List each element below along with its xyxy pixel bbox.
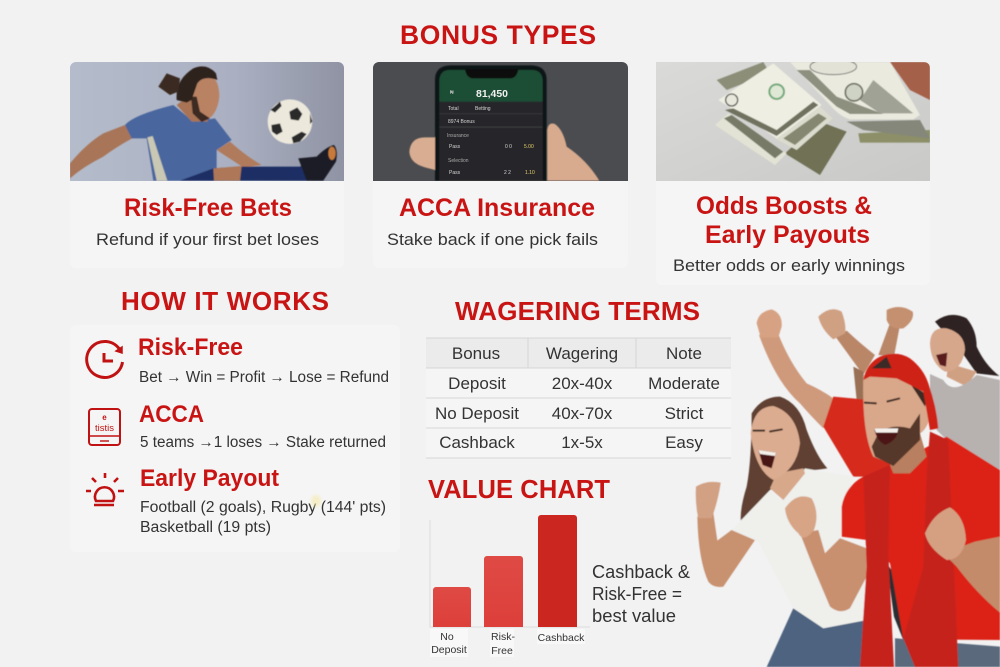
left woman hair	[741, 397, 827, 527]
icon: betting slip: tistis	[95, 423, 114, 434]
table: wagering terms: Note	[666, 344, 702, 363]
text: stake back: Stake back if one pick fails	[387, 230, 598, 249]
text: refund: Refund if your first bet loses	[96, 230, 319, 249]
axis labels: Deposit	[431, 644, 467, 656]
photo: footballer kicking ball	[70, 62, 344, 181]
panel: how it works	[70, 325, 400, 552]
phone labels: 8974 Bonus	[448, 119, 475, 125]
left woman raised arm	[697, 513, 755, 587]
bar chart: value	[430, 515, 590, 657]
man raised arm	[759, 335, 833, 428]
back woman arms	[878, 325, 899, 357]
icon: betting slip	[89, 409, 120, 445]
text: acca steps: 5 teams →1 loses → Stake returned	[140, 434, 386, 451]
panel: odds boosts	[656, 59, 930, 285]
heading: how it works: HOW IT WORKS	[121, 286, 329, 316]
heading: acca insurance: ACCA Insurance	[399, 194, 595, 222]
icon: alarm light	[86, 473, 124, 505]
scarf	[860, 465, 894, 667]
heading: acca: ACCA	[139, 401, 204, 428]
bar: no deposit	[433, 587, 471, 627]
table: wagering terms: Deposit	[448, 374, 506, 393]
phone labels	[447, 89, 535, 176]
table: wagering terms: Easy	[665, 433, 703, 452]
photo: phone in hand	[373, 62, 628, 181]
table: wagering terms: 1x-5x	[561, 433, 603, 452]
panel: risk-free bets	[70, 62, 344, 268]
heading: wagering terms: WAGERING TERMS	[455, 296, 700, 326]
phone labels: 1.10	[525, 170, 535, 176]
text: early payout sports: Football (2 goals), Rugby (144' pts)	[140, 499, 386, 516]
phone labels: Betting	[475, 106, 491, 112]
dark legs	[888, 566, 904, 640]
table: wagering terms: Moderate	[648, 374, 720, 393]
callout: best value: Cashback &	[592, 561, 691, 582]
text: risk-free steps: Bet → Win = Profit → Lose = Refund	[139, 369, 389, 386]
heading: odds boosts: Early Payouts	[705, 221, 870, 249]
left woman jeans	[767, 608, 867, 667]
text: early payout sports: Basketball (19 pts)	[140, 519, 271, 536]
table: wagering terms: Cashback	[439, 433, 515, 452]
axis labels: Risk-	[491, 631, 515, 643]
callout: best value: Risk-Free =	[592, 583, 682, 604]
heading: risk-free: Risk-Free	[138, 334, 243, 361]
title: BONUS TYPES	[400, 20, 596, 50]
photo: dollar bills	[656, 59, 930, 181]
table: wagering terms: Strict	[665, 404, 704, 423]
left woman face	[751, 406, 800, 480]
phone labels: Pass	[449, 144, 461, 150]
left woman shirt	[732, 468, 867, 628]
phone labels: 81,450	[476, 89, 508, 100]
panel: acca insurance	[373, 62, 628, 268]
man right arm	[943, 537, 1000, 613]
photo: cheering fans	[696, 307, 1000, 667]
text: better odds: Better odds or early winnings	[673, 256, 905, 275]
man trousers	[895, 638, 1000, 667]
table: wagering terms: Bonus	[452, 344, 500, 363]
heading: odds boosts: Odds Boosts &	[696, 192, 872, 220]
phone labels: Pass	[449, 170, 461, 176]
icon: betting slip: e	[102, 413, 107, 422]
callout: best value: best value	[592, 605, 676, 626]
phone labels: 5.00	[524, 144, 534, 150]
axis labels: Free	[491, 645, 513, 657]
man left arm and fist	[800, 530, 867, 611]
phone labels: Total	[448, 106, 459, 112]
bar: cashback	[538, 515, 577, 627]
phone labels: Insurance	[447, 133, 469, 139]
phone labels: 0 0	[505, 144, 512, 150]
icon: clock	[87, 341, 122, 377]
phone labels: Selection	[448, 158, 469, 164]
phone labels: 2 2	[504, 170, 511, 176]
axis labels: Cashback	[538, 632, 585, 644]
table: wagering terms	[426, 338, 731, 458]
table: wagering terms: 40x-70x	[552, 404, 613, 423]
back woman hair, face and top	[935, 315, 999, 376]
axis labels: No	[440, 631, 454, 643]
red shirt	[842, 437, 1000, 640]
axis labels	[430, 629, 585, 657]
man neck	[890, 433, 927, 473]
man head	[863, 375, 932, 465]
table: wagering terms: Wagering	[546, 344, 618, 363]
heading: value chart: VALUE CHART	[428, 476, 610, 504]
phone labels: ₦	[450, 90, 454, 96]
table: wagering terms: 20x-40x	[552, 374, 613, 393]
heading: risk-free bets: Risk-Free Bets	[124, 194, 292, 222]
heading: early payout: Early Payout	[140, 465, 279, 492]
table: wagering terms: No Deposit	[435, 404, 519, 423]
cap	[863, 354, 938, 430]
bar: risk-free	[484, 556, 523, 627]
